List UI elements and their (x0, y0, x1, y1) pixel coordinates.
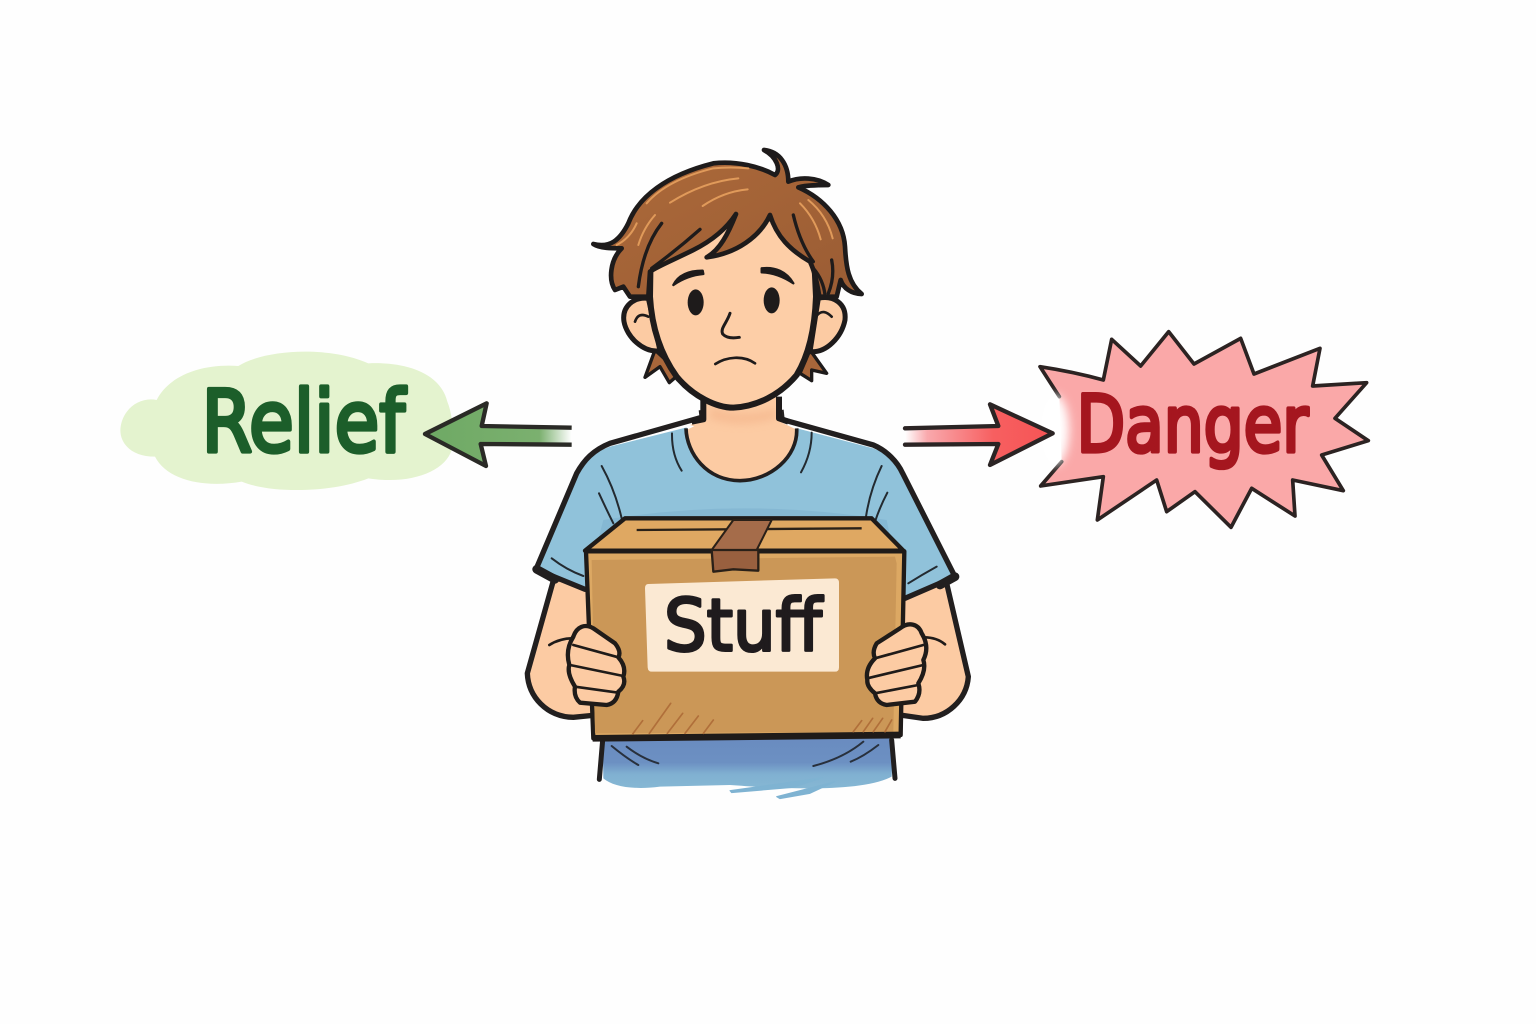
sleeve cuffs (537, 569, 955, 585)
text: Danger: Danger (1077, 379, 1309, 471)
label (645, 578, 839, 672)
arrow: toward danger (905, 404, 1053, 465)
hair highlights (617, 167, 833, 245)
back hair tufts (645, 350, 827, 383)
hair (593, 150, 862, 297)
scuff marks (633, 703, 892, 734)
text: Relief: Relief (202, 373, 406, 473)
relief cloud with label (120, 352, 453, 490)
neck (690, 397, 782, 431)
arrow: toward relief (425, 403, 572, 466)
text: Stuff: Stuff (664, 584, 823, 668)
box (585, 518, 904, 738)
danger starburst with label (1040, 332, 1368, 527)
neck (687, 410, 797, 481)
eyebrows (673, 268, 793, 285)
right hand (867, 624, 926, 705)
left hand (568, 626, 624, 705)
nose and mouth (722, 313, 739, 338)
lower shirt (603, 738, 893, 788)
shirt (536, 427, 955, 600)
face (650, 200, 816, 408)
head (593, 150, 862, 431)
ears (624, 298, 660, 351)
person holding box (527, 150, 968, 799)
body and arms (527, 410, 968, 799)
left arm (527, 578, 597, 717)
tape (712, 520, 772, 550)
right arm (900, 583, 968, 718)
eyes (688, 289, 704, 315)
